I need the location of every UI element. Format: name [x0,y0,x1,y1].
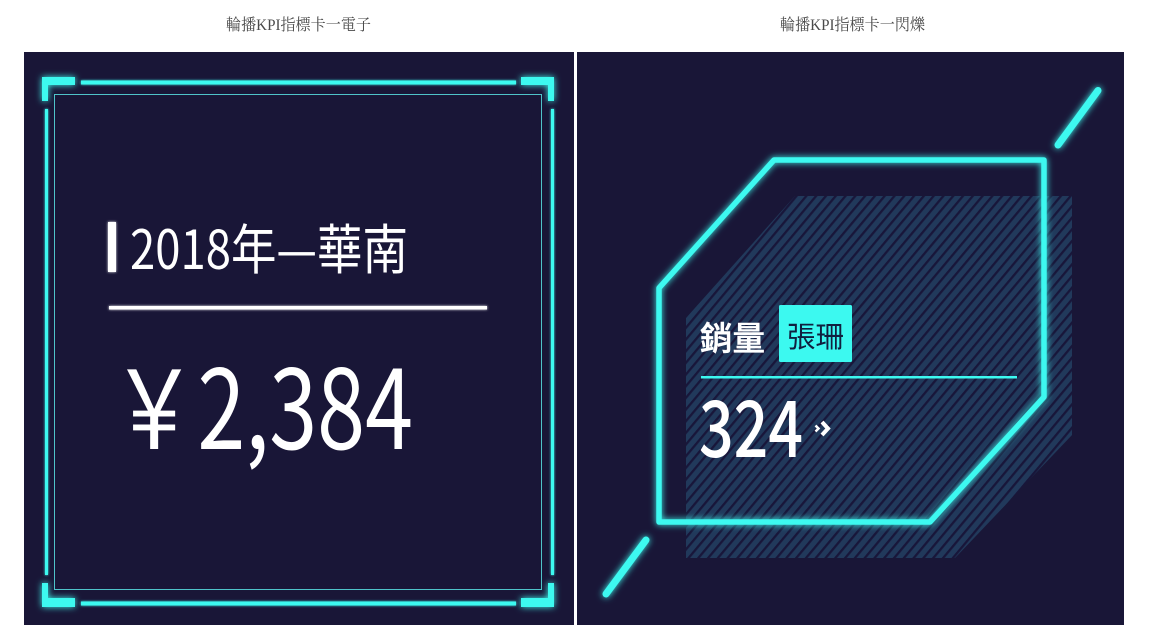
label: sales: 銷量 [700,312,765,360]
tag: name [779,305,852,362]
title: right card: 輪播KPI指標卡一閃爍 [780,16,926,34]
frame: inner thin border [54,94,542,590]
accent bar [108,222,116,272]
divider [701,376,1017,378]
hatched backdrop [686,196,1072,558]
KPI value: 324 [699,368,803,480]
neon slash: bottom left [606,540,646,594]
title: left card: 輪播KPI指標卡一電子 [226,16,371,34]
KPI value: ￥2,384 [111,321,413,481]
icon: double chevron [816,422,828,435]
panel: flashing KPI card [577,52,1124,625]
tag: name: 張珊 [787,314,844,356]
neon slash: top right [1058,90,1098,145]
heading: year and region: 2018年—華南 [130,206,408,285]
frame: corner brackets [42,77,554,607]
frame: edge lines [45,80,554,606]
divider [109,306,487,310]
neon outline [659,160,1044,522]
panel: electronic KPI card [24,52,574,625]
